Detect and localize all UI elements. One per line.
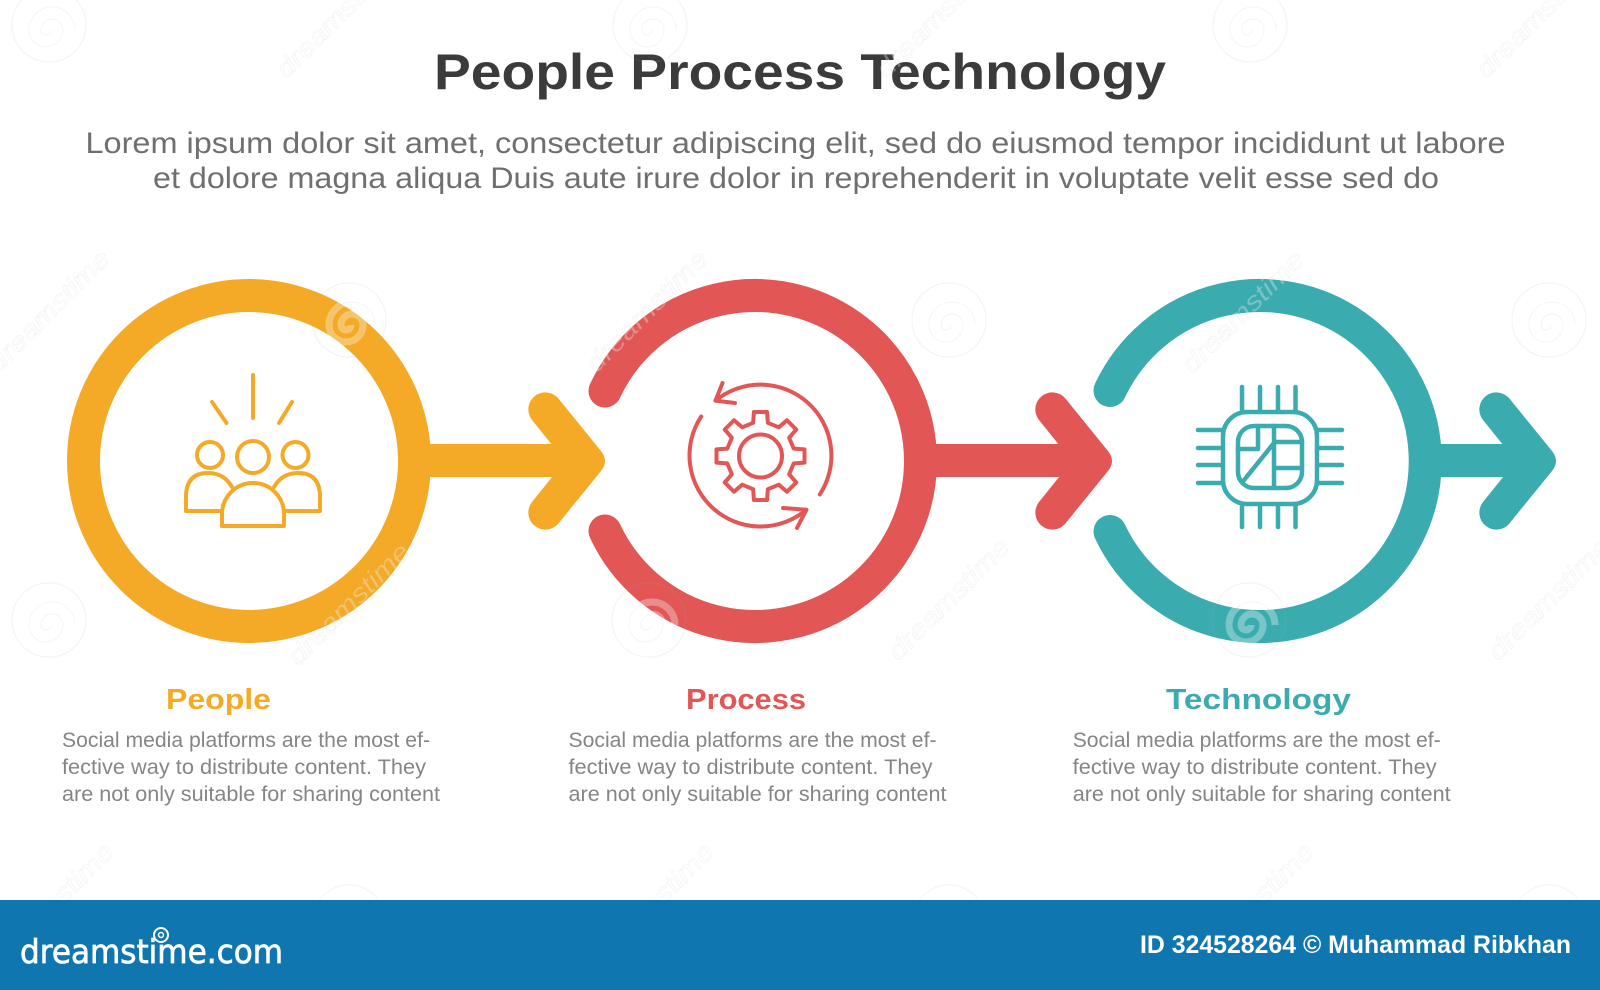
subtitle text block: et dolore magna aliqua Duis aute irure dolor in reprehenderit in voluptate velit esse sed do — [153, 162, 1439, 195]
text block: process — [568, 728, 947, 806]
ring: process — [605, 296, 920, 627]
watermark overlay: dreamstime — [881, 531, 1016, 666]
icon: gear with cycle arrows — [690, 383, 831, 528]
text block: technology: fective way to distribute content. They — [1073, 755, 1437, 779]
panel: process — [568, 296, 1112, 806]
watermark overlay: dreamstime — [1481, 531, 1600, 666]
watermark overlay: dreamstime — [281, 536, 416, 671]
title: People Process Technology — [434, 44, 1166, 100]
arrow: process to technology — [932, 392, 1112, 530]
heading: people: People — [166, 684, 271, 716]
text block: people: fective way to distribute content. They — [62, 755, 426, 779]
ring: technology — [1110, 295, 1425, 626]
text block: process: Social media platforms are the most ef- — [568, 728, 936, 752]
ring: people — [84, 296, 414, 626]
text block: process: fective way to distribute content. They — [568, 755, 933, 779]
icon: people group — [186, 375, 320, 526]
text block: people — [62, 728, 440, 806]
panel: people — [62, 296, 605, 806]
arrow: technology output — [1436, 392, 1556, 530]
panel: technology — [1073, 295, 1556, 806]
watermark overlay: dreamstime — [1175, 244, 1310, 379]
heading: process: Process — [686, 684, 806, 716]
footer banner — [0, 900, 1600, 990]
heading: technology: Technology — [1166, 684, 1351, 716]
text block: technology — [1073, 728, 1451, 806]
text block: people: are not only suitable for sharing content — [62, 782, 440, 806]
subtitle text block — [86, 127, 1506, 195]
text block: technology: are not only suitable for sharing content — [1073, 782, 1451, 806]
subtitle text block: Lorem ipsum dolor sit amet, consectetur adipiscing elit, sed do eiusmod tempor incididunt ut labore — [86, 127, 1506, 160]
watermark overlay: dreamstime — [585, 836, 720, 971]
footer credit: ID 324528264 © Muhammad Ribkhan — [1140, 931, 1571, 959]
arrow: people to process — [425, 392, 605, 530]
text block: technology: Social media platforms are the most ef- — [1073, 728, 1441, 752]
text block: process: are not only suitable for sharing content — [568, 782, 947, 806]
watermark overlay: dreamstime — [579, 243, 714, 378]
icon: microchip — [1198, 387, 1342, 527]
footer logo: dreamstime.com — [20, 932, 283, 971]
watermark overlay: dreamstime — [1185, 836, 1320, 971]
text block: people: Social media platforms are the most ef- — [62, 728, 430, 752]
